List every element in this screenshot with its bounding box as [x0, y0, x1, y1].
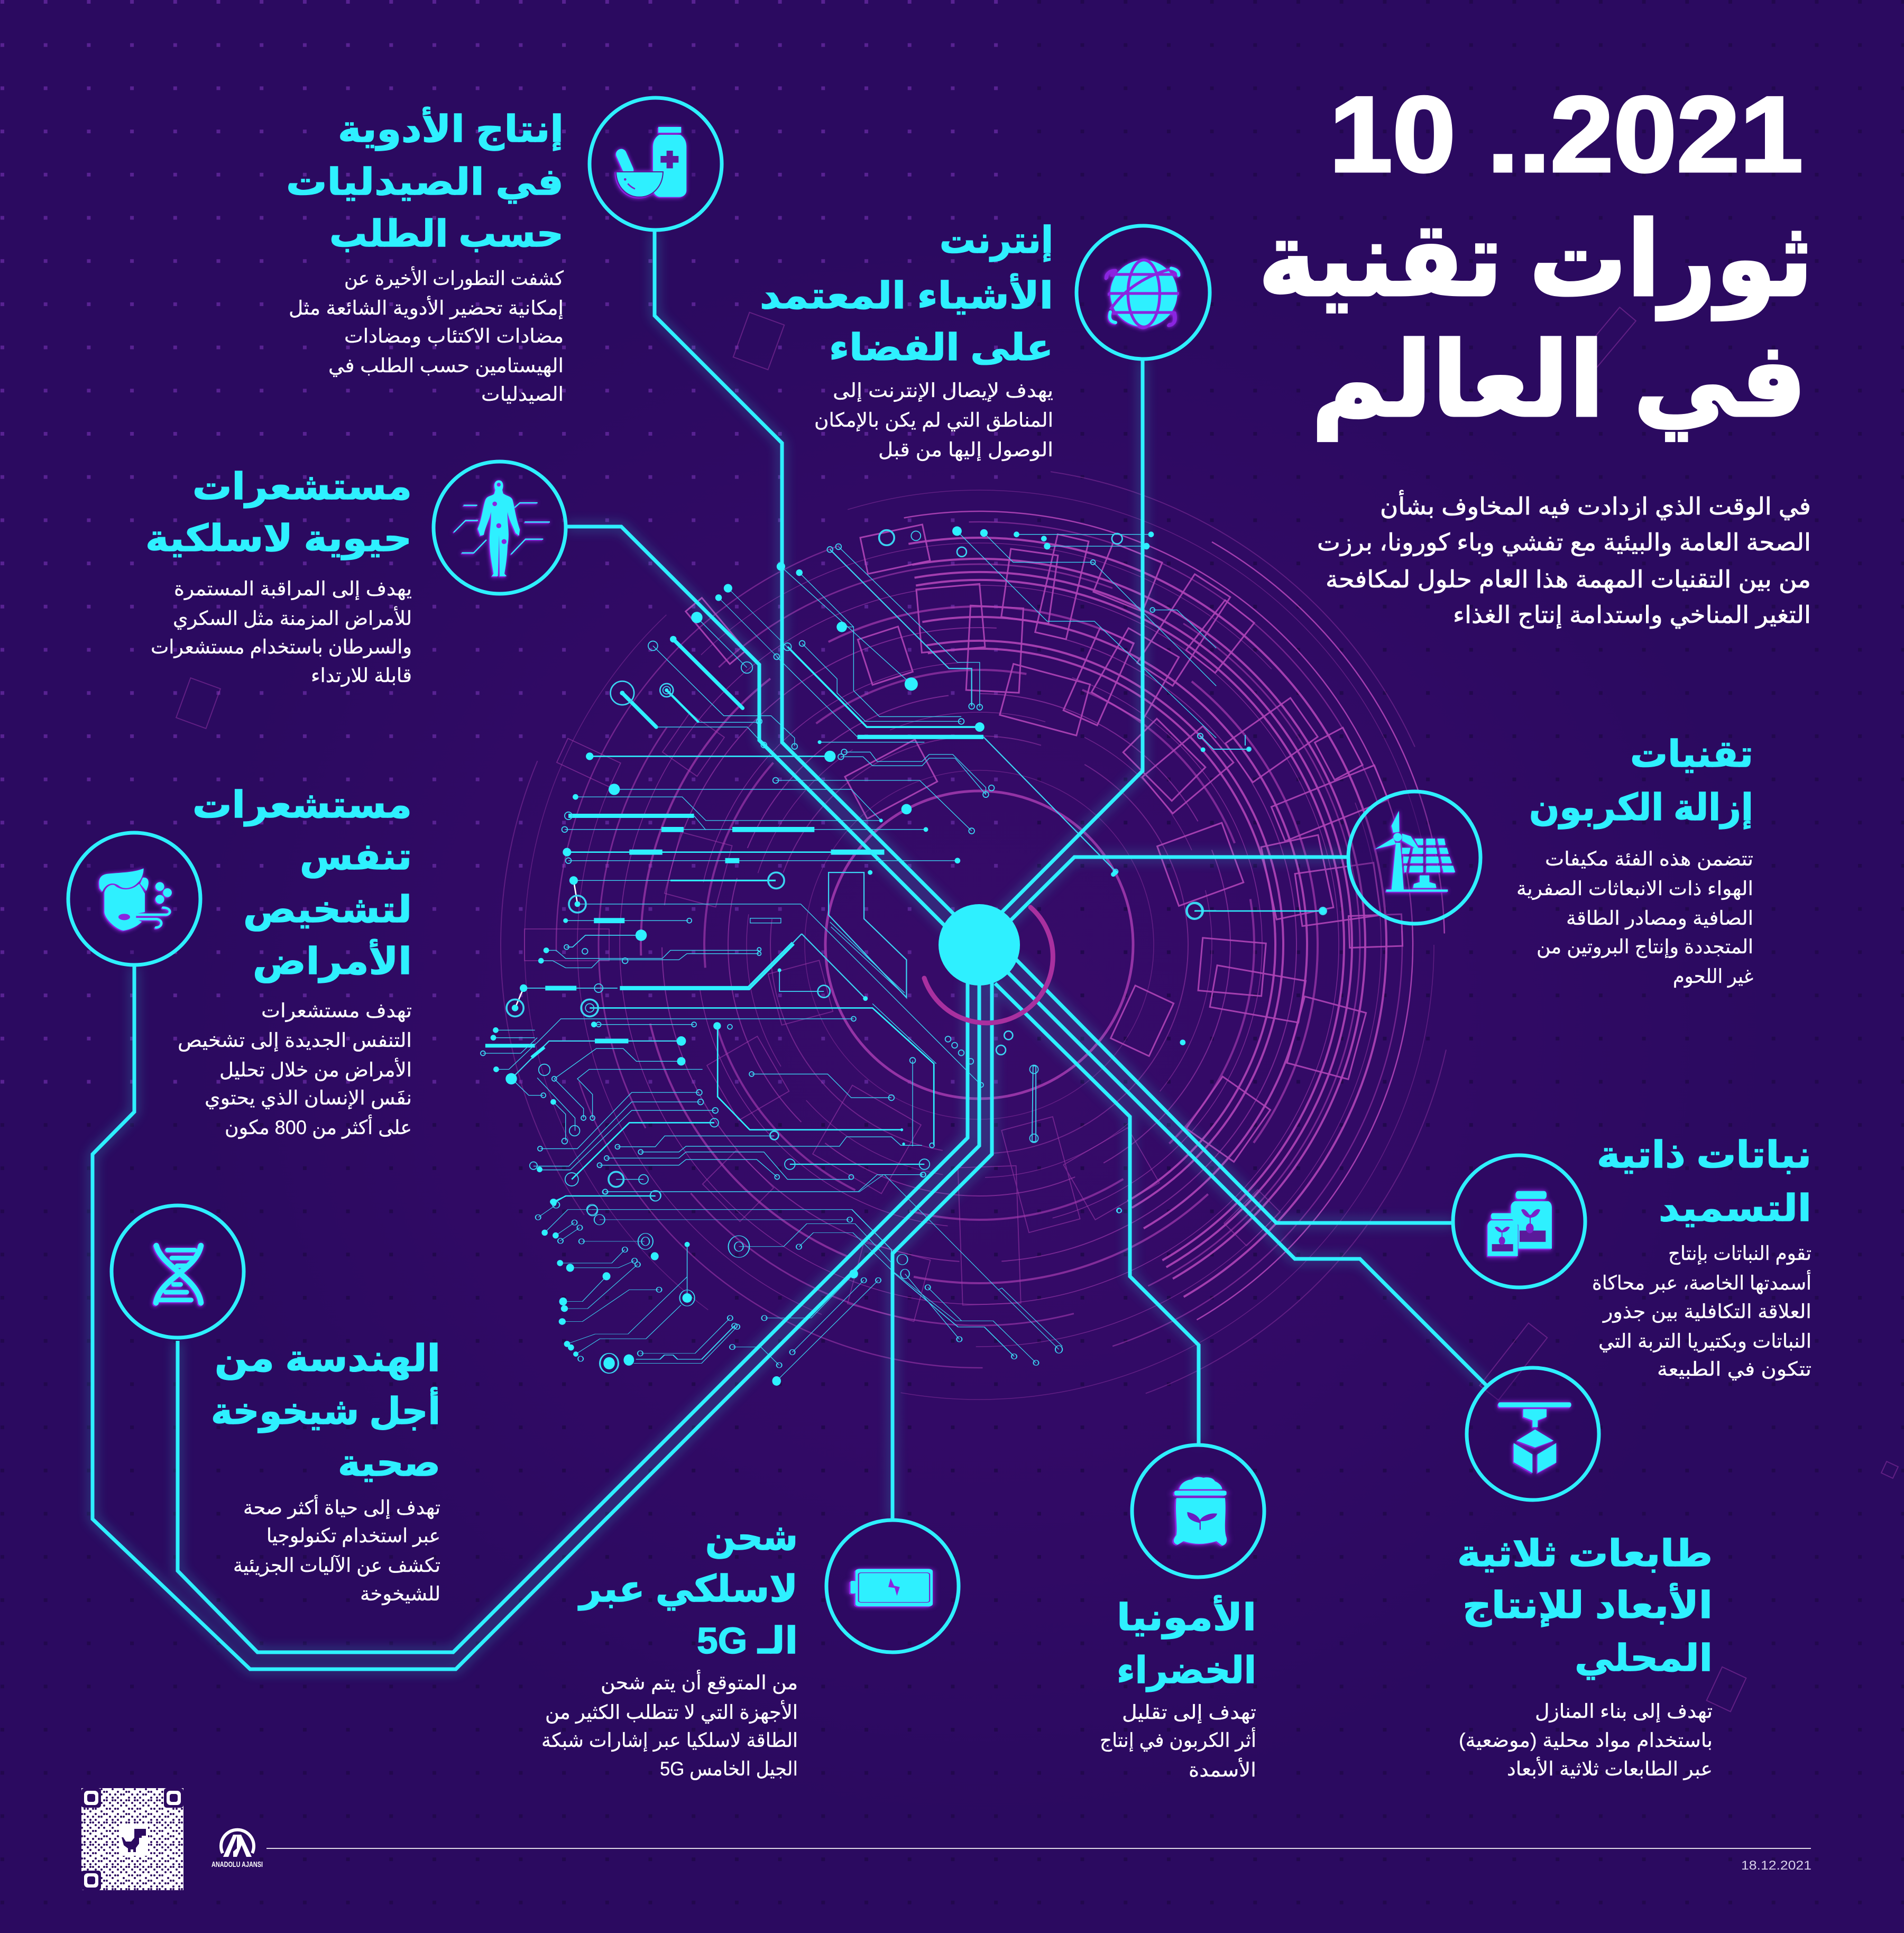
heading: wireless charging: شحن [705, 1516, 798, 1559]
text: 3D printers: عبر الطابعات ثلاثية الأبعاد [1507, 1756, 1713, 1780]
title: في العالم [1311, 323, 1807, 441]
heading: breath sensors: الأمراض [253, 939, 412, 983]
heading: healthy ageing: صحية [338, 1442, 440, 1484]
text: breath sensors: نفَس الإنسان الذي يحتوي [205, 1087, 412, 1109]
icon: wind turbine and solar panel [1348, 791, 1480, 924]
heading: healthy ageing: الهندسة من [215, 1338, 440, 1380]
icon: 3D printer [1467, 1368, 1599, 1500]
heading: biosensors: مستشعرات [192, 466, 412, 508]
text: drug production [289, 266, 564, 405]
heading: biosensors: حيوية لاسلكية [145, 518, 412, 560]
panel: drug production [286, 107, 564, 405]
heading: self-fertilizing plants [1597, 1134, 1811, 1229]
panel: 5G wireless charging [541, 1516, 798, 1780]
heading: internet of things: إنترنت [940, 219, 1053, 262]
heading: wireless charging: الـ 5G [697, 1620, 798, 1661]
title: 2021.. 10 [1329, 75, 1803, 195]
text: drug production: الهيستامين حسب الطلب في [328, 355, 564, 377]
heading: 3D printers [1457, 1533, 1713, 1680]
QR code [81, 1788, 183, 1890]
text: self-fertilizing plants: تقوم النباتات بإنتاج [1668, 1242, 1811, 1265]
central hub [939, 904, 1020, 986]
text: carbon removal: الصافية ومصادر الطاقة [1566, 907, 1753, 929]
icon: battery [826, 1520, 959, 1652]
logo: Anadolu Agency [211, 1830, 263, 1869]
text: green ammonia: أثر الكربون في إنتاج [1100, 1727, 1256, 1752]
text: biosensors: والسرطان باستخدام مستشعرات [151, 636, 412, 658]
text: healthy ageing [233, 1495, 440, 1605]
text: 3D printers: تهدف إلى بناء المنازل [1535, 1700, 1713, 1723]
glow of connector lines [93, 231, 1488, 1669]
text: drug production: مضادات الاكتئاب ومضادات [344, 325, 564, 347]
icon: human body with sensors [434, 462, 566, 594]
text: breath sensors [178, 1000, 412, 1139]
heading: carbon removal: تقنيات [1630, 733, 1753, 775]
heading: healthy ageing [211, 1338, 440, 1484]
icon: globe [1077, 226, 1210, 359]
text: self-fertilizing plants: العلاقة التكافلية بين جذور [1602, 1301, 1811, 1323]
text: drug production: كشفت التطورات الأخيرة عن [344, 266, 564, 290]
logo: Anadolu Agency: ANADOLU AJANSI [211, 1860, 263, 1869]
text: internet of things: الوصول إليها من قبل [878, 439, 1053, 461]
text: breath sensors: تهدف مستشعرات [261, 1000, 412, 1022]
icon: DNA helix [112, 1205, 244, 1338]
icon: medicine bottle and mortar [590, 98, 722, 230]
decorative radial technical pattern [344, 309, 1615, 1580]
heading: internet of things: الأشياء المعتمد [760, 273, 1053, 316]
text: carbon removal: الهواء ذات الانبعاثات الصفرية [1516, 878, 1753, 900]
heading: healthy ageing: أجل شيخوخة [211, 1387, 440, 1433]
circuit rings [481, 530, 1203, 1216]
panel: green ammonia [1100, 1595, 1256, 1781]
heading: 3D printers: المحلي [1575, 1637, 1713, 1680]
circuit network: lower part [536, 1172, 1121, 1386]
circuit dots [491, 527, 1206, 1206]
panel: breath sensors [178, 784, 412, 1139]
heading: breath sensors: مستشعرات [192, 784, 412, 826]
text: 3D printers [1459, 1700, 1713, 1780]
panel: wireless biosensors [145, 466, 412, 687]
heading: breath sensors: تنفس [300, 836, 412, 878]
text: biosensors: قابلة للارتداء [311, 665, 412, 687]
intro text: الصحة العامة والبيئية مع تفشي وباء كورونا، برزت [1317, 529, 1811, 557]
text: biosensors: يهدف إلى المراقبة المستمرة [174, 578, 412, 600]
text: 3D printers: باستخدام مواد محلية (موضعية) [1459, 1729, 1713, 1752]
intro text [1317, 490, 1811, 629]
heading: 3D printers: طابعات ثلاثية [1457, 1533, 1713, 1574]
heading: internet of things: على الفضاء [829, 327, 1053, 368]
isolated carbon-side circuit [1112, 733, 1327, 1045]
text: carbon removal [1516, 848, 1753, 988]
heading: drug production: إنتاج الأدوية [338, 107, 564, 151]
text: healthy ageing: عبر استخدام تكنولوجيا [266, 1525, 440, 1547]
text: carbon removal: غير اللحوم [1673, 965, 1753, 988]
text: breath sensors: الأمراض من خلال تحليل [219, 1057, 412, 1081]
text: biosensors [151, 578, 412, 687]
icon: fertilizer jars [1453, 1155, 1585, 1287]
decorative floating outlines [176, 307, 1898, 1711]
text: healthy ageing: تهدف إلى حياة أكثر صحة [243, 1495, 440, 1519]
text: green ammonia: تهدف إلى تقليل [1122, 1701, 1256, 1724]
panel: 3D printers [1457, 1533, 1713, 1780]
text: self-fertilizing plants: أسمدتها الخاصة، عبر محاكاة [1592, 1270, 1811, 1294]
heading: biosensors [145, 466, 412, 560]
panel: carbon removal [1516, 733, 1753, 988]
text: healthy ageing: للشيخوخة [360, 1583, 440, 1605]
panel: space internet of things [760, 219, 1053, 461]
text: wireless charging: الطاقة لاسلكيا عبر إشارات شبكة [541, 1729, 798, 1752]
heading: internet of things [760, 219, 1053, 368]
text: internet of things: يهدف لإيصال الإنترنت إلى [833, 380, 1053, 402]
text: carbon removal: تتضمن هذه الفئة مكيفات [1545, 848, 1753, 870]
intro text: في الوقت الذي ازدادت فيه المخاوف بشأن [1380, 490, 1811, 521]
heading: drug production: حسب الطلب [329, 213, 564, 254]
title [1258, 75, 1813, 441]
text: healthy ageing: تكشف عن الآليات الجزيئية [233, 1554, 440, 1577]
text: green ammonia [1100, 1701, 1256, 1781]
heading: drug production [286, 107, 564, 254]
heading: self-fertilizing plants: نباتات ذاتية [1597, 1134, 1811, 1175]
icon: face breathing [68, 833, 200, 965]
text: internet of things: المناطق التي لم يكن بالإمكان [814, 409, 1053, 431]
text: carbon removal: المتجددة وإنتاج البروتين من [1537, 936, 1753, 958]
heading: 3D printers: الأبعاد للإنتاج [1463, 1583, 1713, 1627]
heading: self-fertilizing plants: التسميد [1659, 1188, 1811, 1229]
text: drug production: إمكانية تحضير الأدوية الشائعة مثل [289, 296, 564, 319]
heading: drug production: في الصيدليات [286, 161, 564, 204]
heading: wireless charging: لاسلكي عبر [578, 1568, 798, 1610]
heading: green ammonia: الخضراء [1117, 1650, 1256, 1692]
text: internet of things [814, 380, 1053, 461]
text: self-fertilizing plants: تتكون في الطبيعة [1657, 1358, 1811, 1380]
date: 18.12.2021 [1741, 1858, 1811, 1873]
text: wireless charging: الجيل الخامس 5G [660, 1758, 798, 1780]
decorative hub arc [924, 907, 1053, 1023]
heading: breath sensors [192, 784, 412, 983]
text: drug production: الصيدليات [481, 383, 564, 405]
connector lines [93, 231, 1488, 1669]
heading: carbon removal [1529, 733, 1753, 830]
intro text: التغير المناخي واستدامة إنتاج الغذاء [1453, 601, 1811, 629]
heading: green ammonia: الأمونيا [1117, 1595, 1256, 1639]
text: biosensors: للأمراض المزمنة مثل السكري [173, 606, 412, 630]
icon: fertilizer sack [1132, 1445, 1264, 1577]
text: wireless charging: الأجهزة التي لا تتطلب الكثير من [545, 1700, 798, 1724]
text: wireless charging: من المتوقع أن يتم شحن [601, 1670, 798, 1694]
heading: breath sensors: لتشخيص [243, 889, 412, 932]
text: self-fertilizing plants: النباتات وبكتيريا التربة التي [1598, 1330, 1811, 1352]
heading: green ammonia [1117, 1595, 1256, 1692]
panel: healthy ageing engineering [211, 1338, 440, 1605]
footer rule [266, 1848, 1811, 1849]
intro text: من بين التقنيات المهمة هذا العام حلول لمكافحة [1326, 566, 1811, 593]
heading: carbon removal: إزالة الكربون [1529, 787, 1753, 830]
circuit network [481, 527, 1216, 1216]
heading: wireless charging [578, 1516, 798, 1661]
text: breath sensors: على أكثر من 800 مكون [225, 1115, 412, 1139]
text: green ammonia: الأسمدة [1189, 1757, 1256, 1781]
panel: self-fertilizing plants [1592, 1134, 1811, 1380]
text: self-fertilizing plants [1592, 1242, 1811, 1380]
text: breath sensors: التنفس الجديدة إلى تشخيص [178, 1029, 412, 1052]
text: wireless charging [541, 1670, 798, 1780]
title: ثورات تقنية [1258, 202, 1813, 320]
